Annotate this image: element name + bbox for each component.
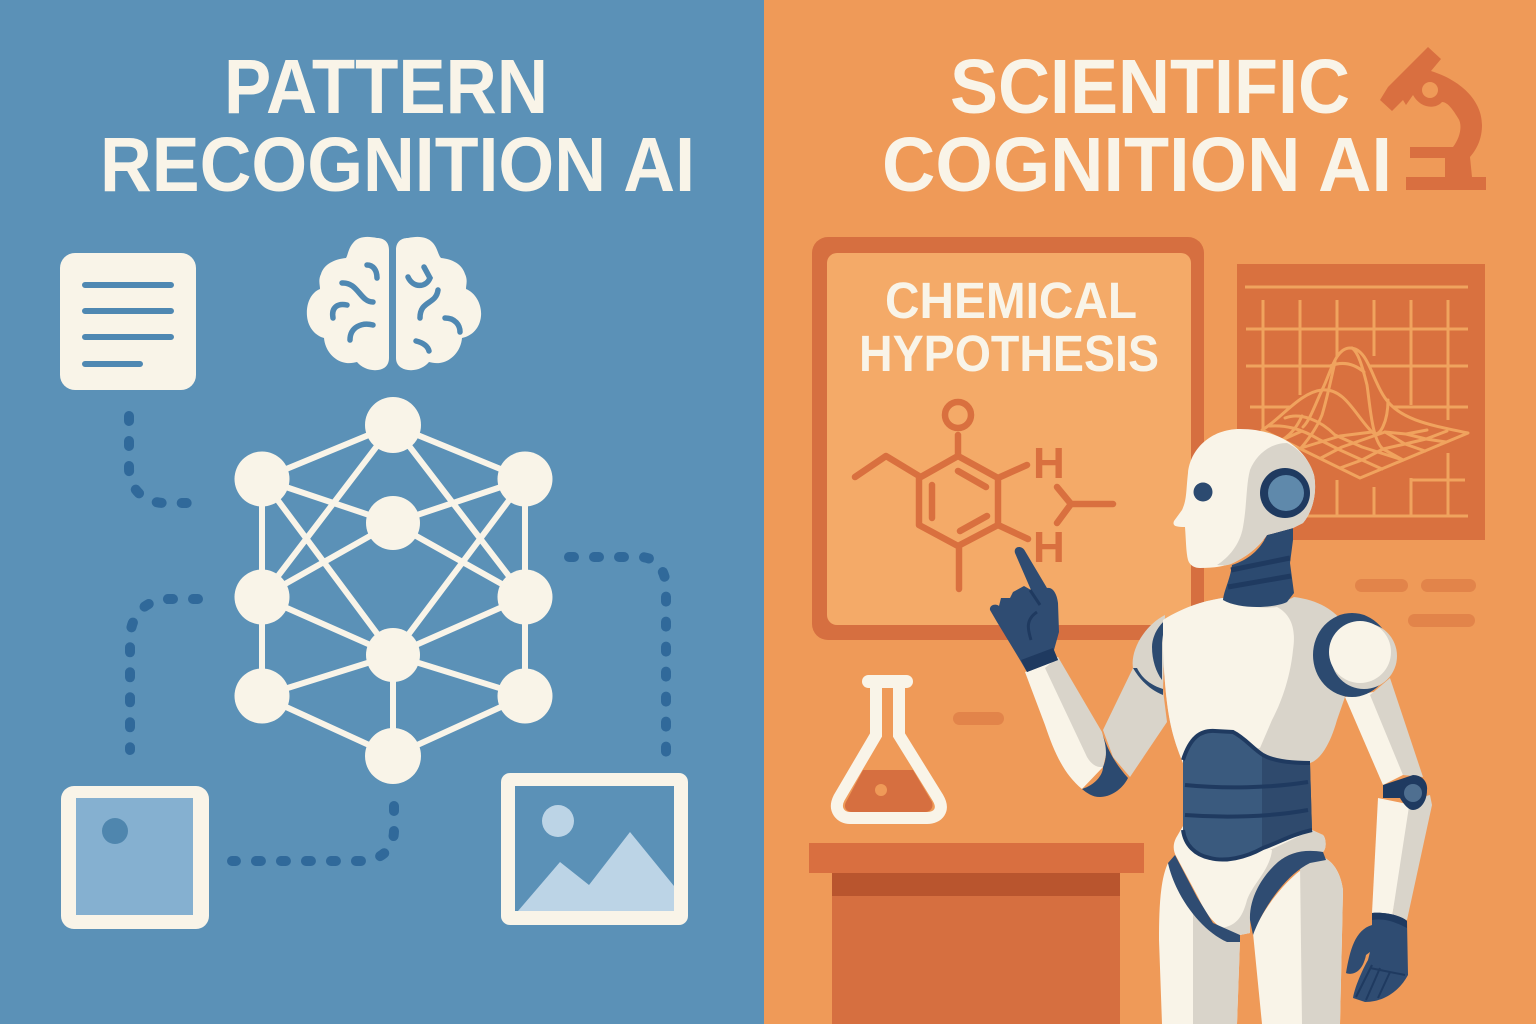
robot legs	[1159, 858, 1343, 1024]
icon: document	[60, 253, 196, 390]
robot head	[1173, 429, 1315, 568]
icon: microscope	[1380, 47, 1486, 190]
whiteboard: chemical hypothesis	[812, 237, 1204, 640]
title: pattern recognition AI: PATTERN	[224, 44, 548, 130]
icon: brain	[307, 237, 481, 370]
dotted connectors	[129, 416, 666, 861]
title: scientific cognition AI: SCIENTIFIC	[950, 44, 1350, 130]
molecule diagram	[855, 402, 1113, 589]
title: scientific cognition AI	[882, 44, 1392, 208]
lab table	[809, 843, 1144, 1024]
robot waist armor	[1183, 731, 1312, 860]
robot pointing hand	[990, 547, 1059, 672]
robot figure	[990, 429, 1432, 1024]
title: scientific cognition AI: COGNITION AI	[882, 122, 1392, 208]
icon: landscape photo	[501, 773, 688, 925]
robot left arm raised	[1025, 615, 1172, 797]
board heading	[859, 272, 1159, 382]
icon: flask	[837, 675, 941, 818]
panel: pattern recognition AI	[0, 0, 764, 1024]
board heading: HYPOTHESIS	[859, 325, 1159, 382]
icon: image square	[61, 786, 209, 929]
chart: 3D surface plot	[1237, 264, 1485, 540]
panel: scientific cognition AI	[764, 0, 1536, 1024]
robot neck	[1223, 528, 1294, 607]
molecule diagram: H	[1033, 523, 1065, 572]
molecule diagram: H	[1033, 439, 1065, 488]
board heading: CHEMICAL	[885, 272, 1137, 329]
title: pattern recognition AI	[100, 44, 695, 208]
robot pelvis	[1174, 826, 1326, 935]
decorative note pills	[953, 579, 1476, 725]
title: pattern recognition AI: RECOGNITION AI	[100, 122, 695, 208]
robot torso	[1163, 597, 1345, 763]
robot hip straps	[1168, 851, 1326, 942]
robot right arm	[1345, 678, 1432, 920]
robot right hand	[1346, 913, 1408, 1002]
robot shoulder joint	[1313, 613, 1397, 697]
neural network diagram	[234, 397, 552, 784]
